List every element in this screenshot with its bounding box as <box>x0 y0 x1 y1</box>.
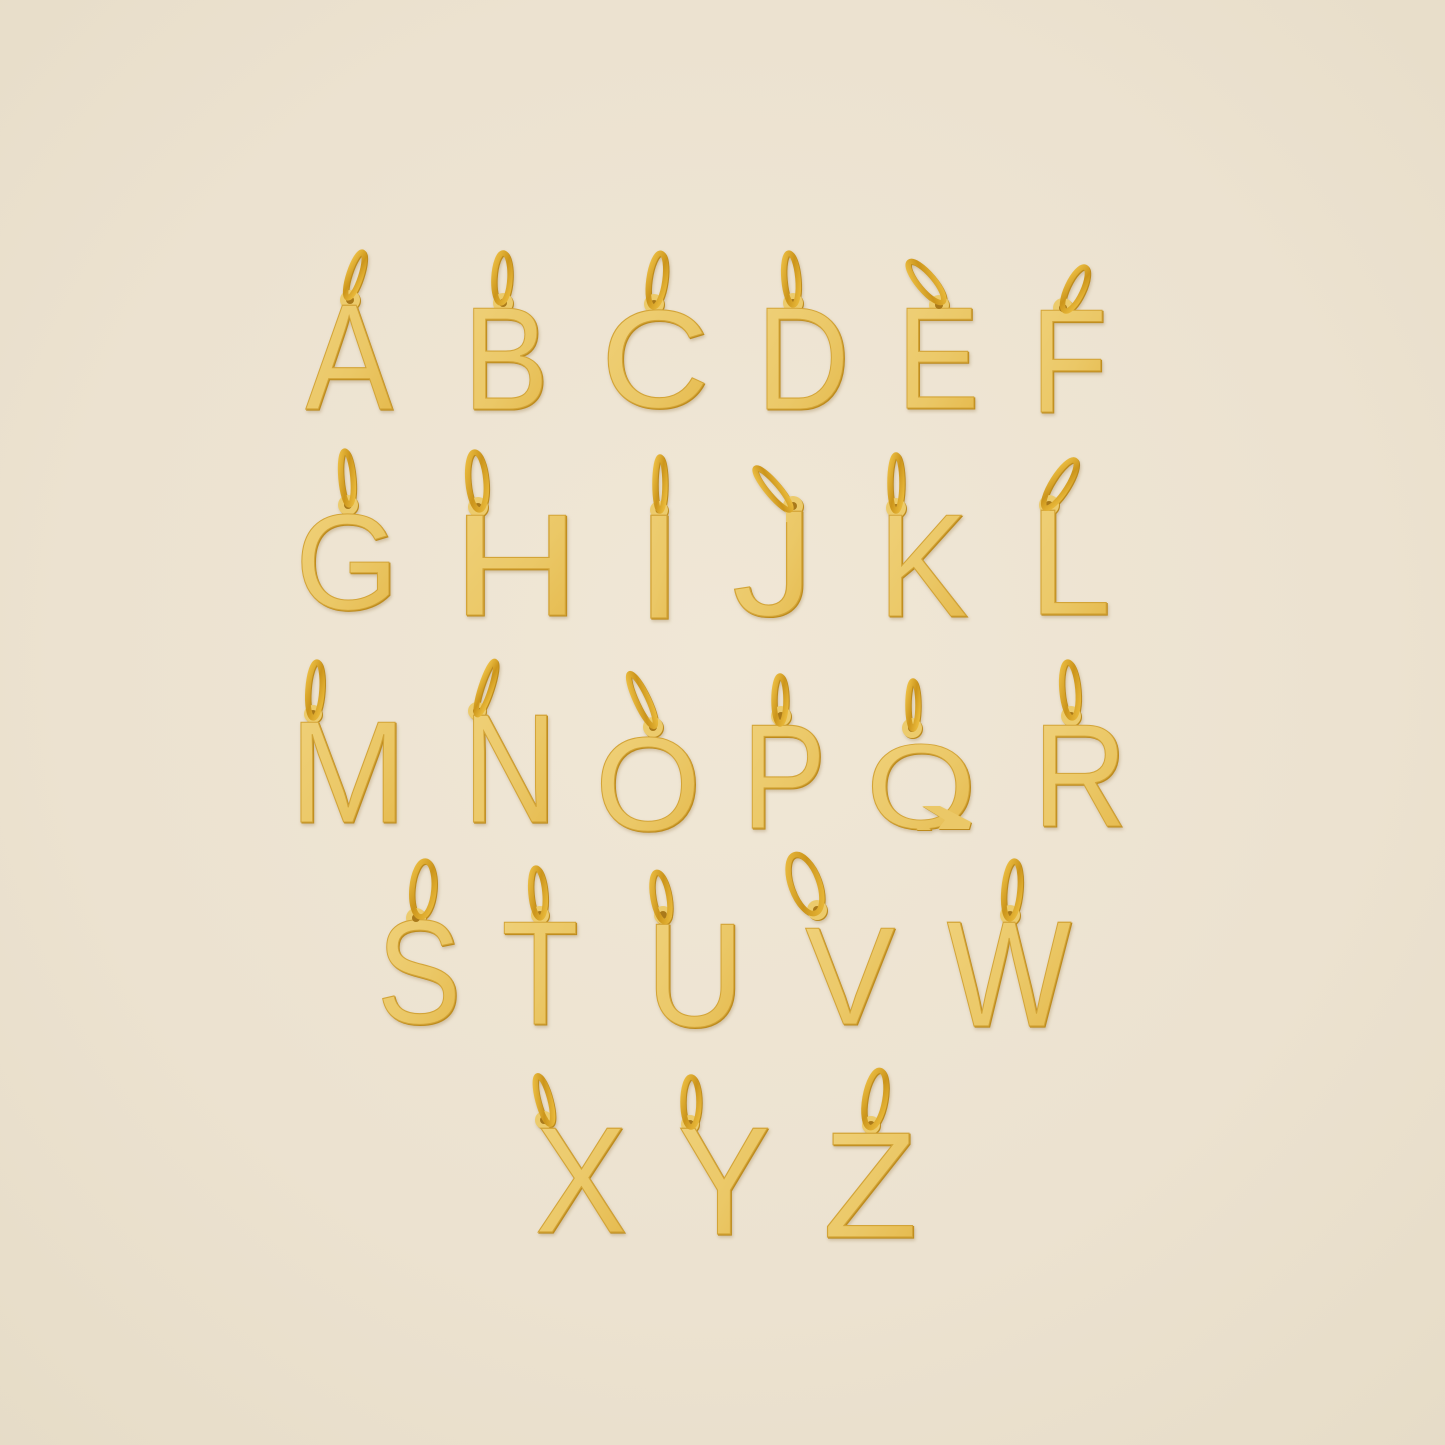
charm F: F <box>1031 278 1107 443</box>
charm E: E <box>897 277 979 439</box>
charm O: O <box>595 709 701 859</box>
charm P: P <box>742 694 826 860</box>
charm Q <box>872 678 974 834</box>
charm H: H <box>452 485 580 646</box>
charm M: M <box>289 692 407 853</box>
charm T: T <box>501 892 579 1056</box>
charm R: R <box>1033 694 1127 858</box>
charm B: B <box>463 277 549 441</box>
charm A: A <box>305 272 393 441</box>
charm X: X <box>535 1095 627 1264</box>
charm C: C <box>601 281 709 437</box>
charm G: G <box>295 486 399 638</box>
charm L: L <box>1029 478 1111 646</box>
charm D: D <box>756 277 850 441</box>
charm S: S <box>377 891 461 1055</box>
charm Z: Z <box>823 1102 917 1270</box>
charm K: K <box>878 484 968 647</box>
charm U: U <box>646 893 744 1058</box>
charm W: W <box>947 891 1072 1059</box>
charm Y: Y <box>678 1096 770 1268</box>
charm N: N <box>463 682 557 856</box>
charm I: I <box>635 484 683 650</box>
charm V: V <box>805 899 895 1054</box>
charm V <box>781 850 895 1054</box>
charm Q: Q <box>866 719 976 854</box>
charm J: J <box>732 479 814 648</box>
